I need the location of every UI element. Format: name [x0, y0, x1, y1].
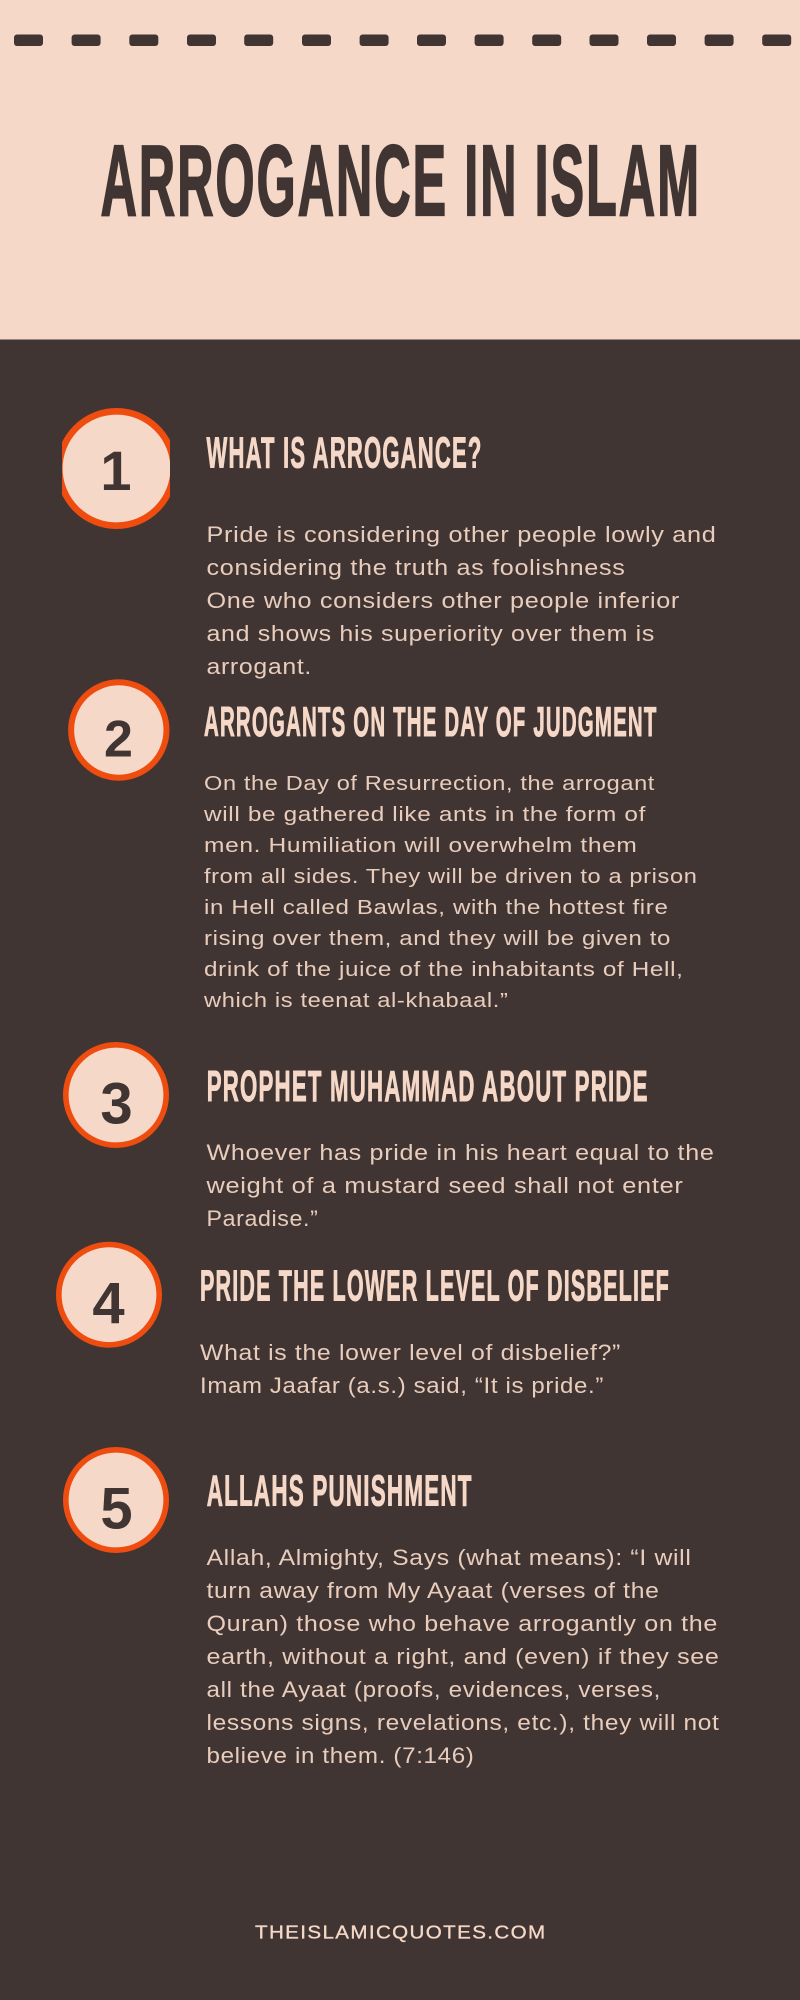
heading 5: ALLAHS PUNISHMENT: [207, 1466, 473, 1516]
body text 4: What is the lower level of disbelief?”: [200, 1340, 621, 1365]
body text 2: drink of the juice of the inhabitants of Hell,: [204, 958, 684, 981]
body text 1: arrogant.: [206, 654, 312, 679]
body text 5: Quran) those who behave arrogantly on the: [206, 1611, 718, 1636]
body text 5: [206, 1545, 720, 1768]
body text 2: [203, 772, 698, 1012]
body text 4: [200, 1340, 621, 1398]
dashed stitch line: [14, 34, 791, 46]
number badge 5: 5: [100, 1476, 133, 1542]
number badge 1: 1: [100, 439, 132, 502]
body text 2: from all sides. They will be driven to a prison: [204, 865, 698, 888]
header panel: [0, 0, 800, 340]
footer website: THEISLAMICQUOTES.COM: [255, 1922, 546, 1942]
body text 4: Imam Jaafar (a.s.) said, “It is pride.”: [200, 1373, 604, 1398]
section 4: pride the lower level of disbelief: [59, 1244, 670, 1398]
body text 1: Pride is considering other people lowly and: [206, 522, 716, 547]
section 1: what is arrogance: [59, 411, 717, 679]
number badge 3: 3: [100, 1072, 133, 1136]
section 3: prophet muhammad about pride: [66, 1045, 715, 1231]
heading 1: WHAT IS ARROGANCE?: [206, 428, 482, 477]
body text 1: considering the truth as foolishness: [206, 555, 626, 580]
body text 1: [206, 522, 716, 679]
number badge 2: 2: [104, 710, 133, 768]
body text 3: Whoever has pride in his heart equal to the: [206, 1140, 714, 1165]
body text 2: in Hell called Bawlas, with the hottest fire: [204, 896, 668, 919]
body text 1: and shows his superiority over them is: [206, 621, 655, 646]
section 5: allahs punishment: [66, 1450, 720, 1768]
number badge 4: [59, 1244, 159, 1345]
body text 5: all the Ayaat (proofs, evidences, verses,: [206, 1677, 661, 1702]
body text 2: rising over them, and they will be given to: [204, 927, 671, 950]
body text 5: lessons signs, revelations, etc.), they will not: [206, 1710, 720, 1735]
number badge 4: 4: [92, 1271, 125, 1336]
body text 2: will be gathered like ants in the form of: [203, 803, 646, 826]
number badge 5: [66, 1450, 166, 1550]
body text 3: weight of a mustard seed shall not enter: [205, 1173, 684, 1198]
body text 2: which is teenat al-khabaal.”: [203, 989, 508, 1012]
body text 1: One who considers other people inferior: [206, 588, 680, 613]
section 2: arrogants on the day of judgment: [71, 682, 698, 1012]
body text 2: On the Day of Resurrection, the arrogant: [204, 772, 655, 795]
number badge 3: [66, 1045, 166, 1145]
body text 3: Paradise.”: [206, 1206, 318, 1231]
body text 5: turn away from My Ayaat (verses of the: [206, 1578, 660, 1603]
body text 5: believe in them. (7:146): [206, 1743, 474, 1768]
number badge 1: [59, 411, 174, 526]
body text 5: Allah, Almighty, Says (what means): “I will: [206, 1545, 692, 1570]
body text 5: earth, without a right, and (even) if they see: [206, 1644, 720, 1669]
number badge 2: [71, 682, 166, 778]
body text 2: men. Humiliation will overwhelm them: [204, 834, 638, 857]
body text 3: [205, 1140, 714, 1231]
